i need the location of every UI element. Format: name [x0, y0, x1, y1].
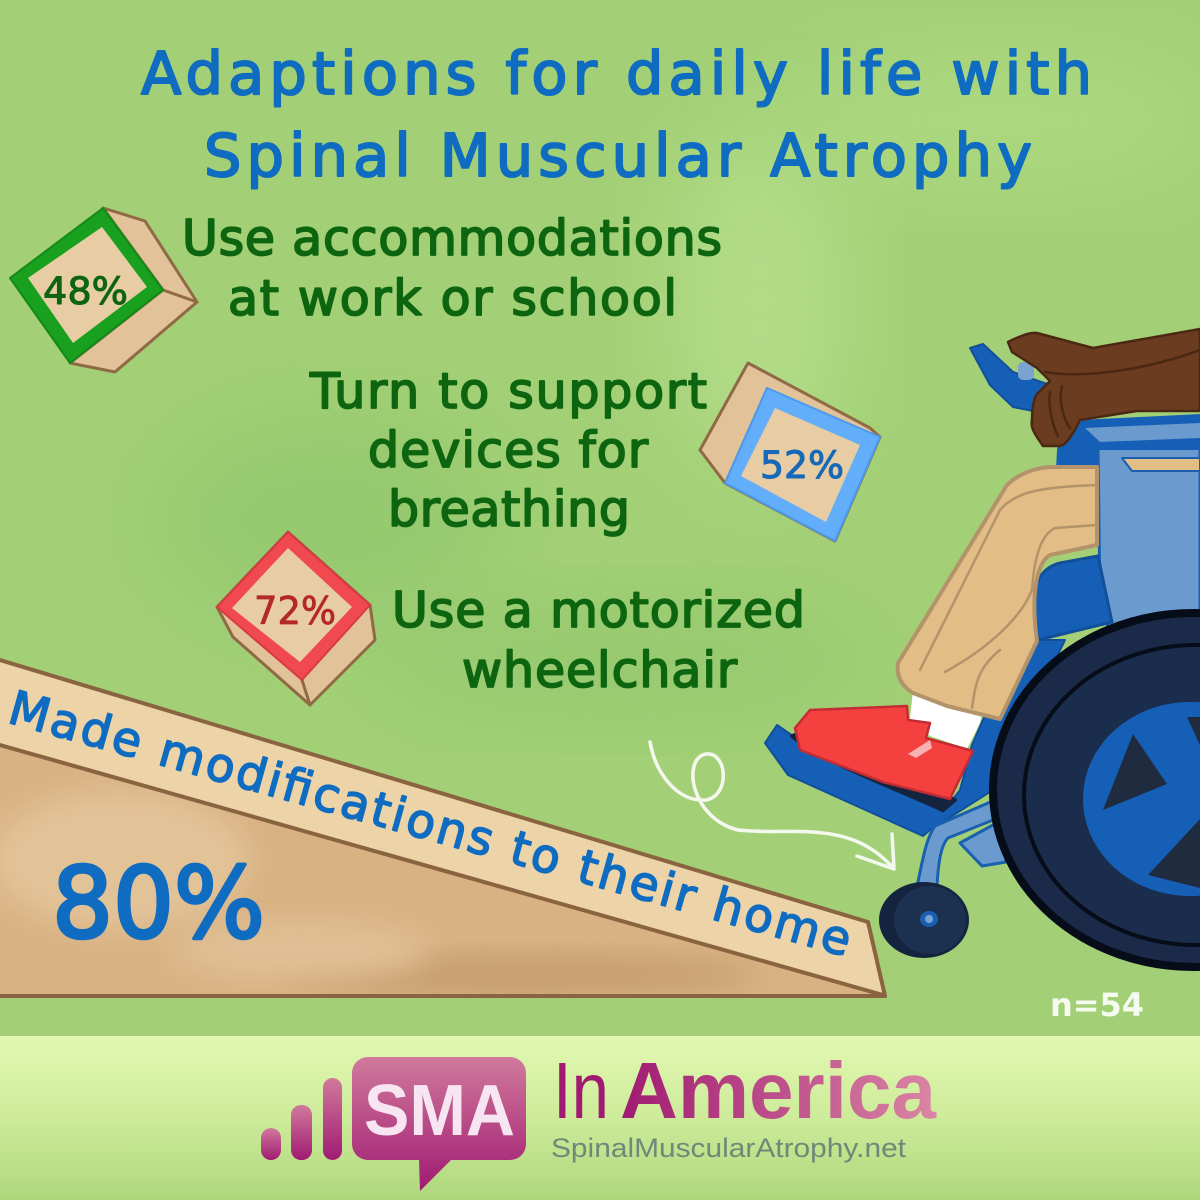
ramp shape — [0, 660, 885, 996]
text: use accommodations: at work or school — [228, 270, 677, 327]
ramp label: Made modifications to their home — [3, 681, 857, 968]
text: use accommodations: Use accommodations — [182, 210, 722, 267]
icon: green block 48%: 48% — [43, 270, 128, 313]
website: SpinalMuscularAtrophy.net — [551, 1133, 907, 1163]
title: Spinal Muscular Atrophy — [204, 121, 1032, 190]
text: motorized wheelchair: wheelchair — [462, 642, 738, 699]
stat block: 72% motorized wheelchair — [217, 532, 805, 705]
arrow: white squiggle pointing to wheelchair — [650, 742, 894, 869]
trouser leg — [898, 467, 1097, 719]
sample size note: n=54 — [1050, 986, 1144, 1024]
frame: light caster stem — [917, 800, 998, 886]
icon: speech bubble with SMA — [352, 1057, 526, 1191]
icon: blue block 52%: 52% — [760, 444, 844, 487]
main wheel — [993, 613, 1200, 967]
under-seat support — [960, 820, 1006, 866]
text: support devices — [309, 363, 707, 538]
icon: green block 48% — [10, 208, 197, 372]
frame: dark leg and footplate — [765, 640, 1065, 836]
icon: blue block 52% — [700, 363, 880, 541]
sock — [910, 690, 985, 749]
text: motorized wheelchair: Use a motorized — [392, 582, 805, 639]
wordmark: America — [620, 1046, 937, 1135]
stat block: 48% accommodations — [10, 208, 722, 372]
text: support devices: Turn to support — [309, 363, 707, 420]
icon: red block 72% — [217, 532, 375, 705]
red shoe — [792, 706, 973, 810]
ramp: 80% home modifications — [0, 660, 885, 996]
text: motorized wheelchair — [392, 582, 805, 699]
text: use accommodations — [182, 210, 722, 327]
icon: speech bubble with SMA: SMA — [364, 1071, 515, 1151]
joystick armrest — [970, 344, 1050, 411]
ramp percentage: 80% — [52, 847, 265, 961]
hand and arm — [1008, 329, 1200, 446]
text: support devices: devices for — [368, 422, 649, 479]
stat block: 52% support devices — [309, 363, 880, 541]
logo: SMA In America — [261, 1046, 937, 1191]
wordmark: In — [553, 1046, 609, 1135]
icon: red block 72%: 72% — [254, 589, 336, 633]
wheelchair illustration — [765, 329, 1200, 967]
title: Adaptions for daily life with — [141, 39, 1092, 108]
seat cushion — [1033, 556, 1112, 640]
footer band — [0, 1036, 1200, 1200]
caster wheel — [879, 882, 969, 958]
title — [141, 39, 1092, 190]
text: support devices: breathing — [388, 481, 630, 538]
icon: signal bars — [261, 1078, 342, 1160]
chair backrest — [1056, 414, 1200, 640]
